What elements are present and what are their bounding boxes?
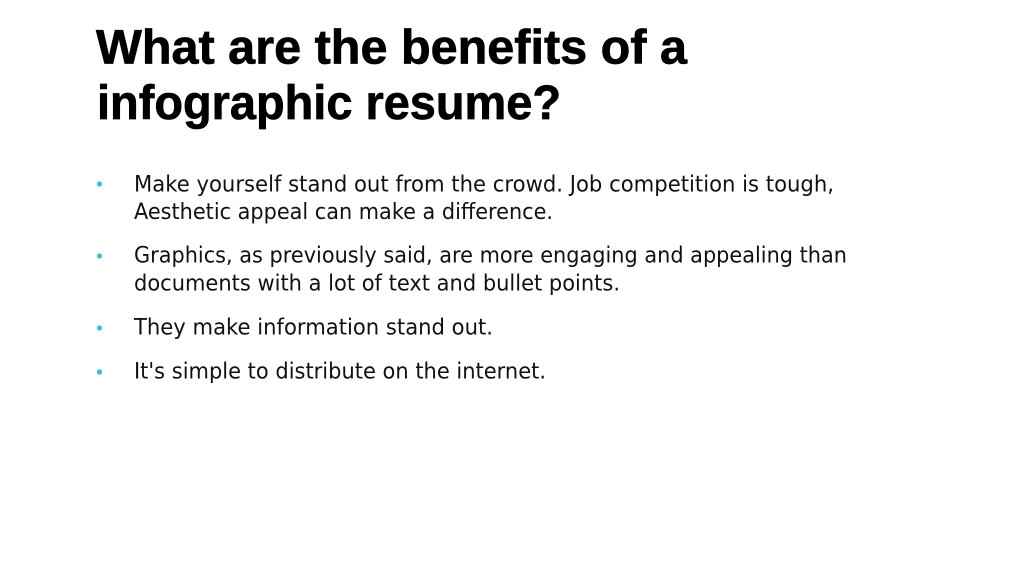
bullet list <box>97 172 847 385</box>
bullet 1: stand out from the crowd: Make yourself stand out from the crowd. Job competition is tough, <box>134 172 834 198</box>
bullet 2: graphics are more engaging: Graphics, as previously said, are more engaging and appealing than <box>134 243 847 269</box>
bullet 2: graphics are more engaging <box>97 243 847 297</box>
bullet 1: stand out from the crowd: Aesthetic appeal can make a difference. <box>134 199 553 225</box>
title: What are the benefits of a <box>96 22 687 74</box>
title <box>96 22 687 130</box>
bullet 1: stand out from the crowd <box>97 172 834 225</box>
bullet 3: information stands out: They make information stand out. <box>133 315 493 341</box>
title: infographic resume? <box>97 77 561 130</box>
bullet 4: simple to distribute: It's simple to distribute on the internet. <box>134 359 546 385</box>
bullet 2: graphics are more engaging: documents with a lot of text and bullet points. <box>134 271 620 297</box>
